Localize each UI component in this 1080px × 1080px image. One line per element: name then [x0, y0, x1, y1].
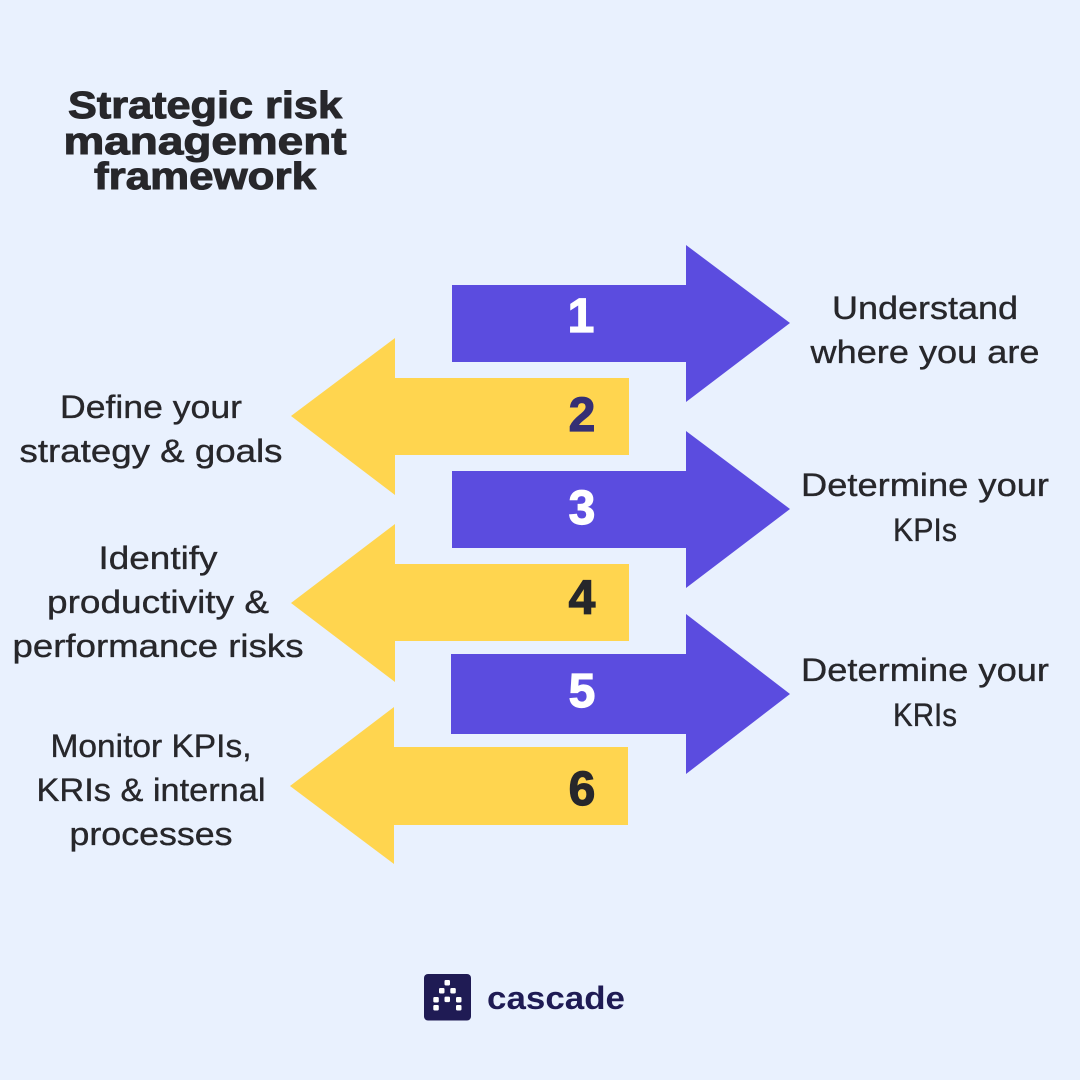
label: step 3: Determine your [801, 467, 1049, 503]
label: step 4: productivity & [47, 584, 269, 620]
arrow 3 [452, 431, 790, 588]
logo: cascade [424, 974, 625, 1020]
wordmark: cascade [487, 980, 625, 1016]
label: step 5: Determine your [801, 652, 1049, 688]
label: step 4 [12, 540, 304, 664]
label: step 2 [20, 389, 282, 469]
label: step 5: KRIs [893, 697, 957, 733]
icon: cascade mark [424, 974, 471, 1020]
label: step 3 [801, 467, 1049, 548]
title: Strategic risk [68, 85, 343, 127]
label: step 1: where you are [809, 334, 1040, 370]
label: step 3: KPIs [893, 512, 957, 548]
arrow 4 [291, 524, 629, 682]
label: step 6: KRIs & internal [36, 772, 266, 808]
arrow 4: 4 [569, 572, 596, 625]
arrow 2 [291, 338, 629, 495]
title: management [64, 121, 347, 163]
label: step 5 [801, 652, 1049, 733]
label: step 2: Define your [60, 389, 242, 425]
arrow 5 [451, 614, 790, 774]
label: step 6: Monitor KPIs, [50, 728, 252, 764]
label: step 4: performance risks [12, 628, 304, 664]
arrow 2: 2 [569, 389, 595, 442]
label: step 1: Understand [832, 290, 1018, 326]
arrow 6 [290, 707, 628, 864]
title: framework [94, 156, 317, 198]
arrow 1 [452, 245, 790, 402]
title [64, 85, 347, 198]
arrow 6: 6 [569, 763, 595, 816]
label: step 2: strategy & goals [20, 433, 282, 469]
label: step 6 [36, 728, 266, 852]
arrow 3: 3 [569, 482, 595, 535]
label: step 1 [809, 290, 1040, 370]
arrow 1: 1 [568, 290, 594, 343]
label: step 4: Identify [98, 540, 218, 576]
label: step 6: processes [70, 816, 232, 852]
arrow 5: 5 [569, 665, 595, 718]
